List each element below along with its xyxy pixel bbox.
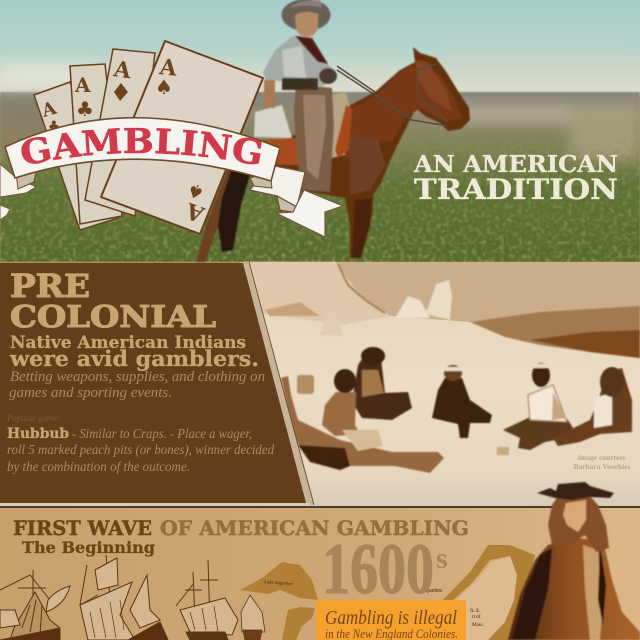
popular game: Hubbub: [7, 426, 69, 442]
right fold: [250, 172, 272, 188]
popular game: - Similar to Craps. - Place a wager,: [72, 426, 252, 441]
subheading: were avid gamblers.: [9, 346, 259, 371]
arm and belt: [264, 80, 275, 108]
left fold: [16, 172, 36, 189]
left hill: [245, 262, 390, 325]
panel: hero photograph: [0, 0, 640, 263]
ridge line: [338, 264, 385, 313]
figure with headband: [432, 365, 492, 438]
heading: [10, 267, 216, 335]
rock formations: [265, 280, 452, 336]
map: St Lawrence and New England: [425, 545, 535, 640]
map: Lake Michigan: [282, 607, 315, 640]
card: ace of clubs upright: ♣: [76, 97, 94, 121]
GAMBLING lettering: GAMBLING: [21, 128, 262, 164]
card: ace of spades: ♠: [155, 75, 173, 99]
hat: [282, 0, 330, 31]
heading: PRE: [10, 267, 90, 305]
callout: illegal: Gambling is illegal: [325, 607, 457, 629]
card: ace of diamonds: [85, 49, 155, 216]
thin dark edge line: [249, 262, 314, 505]
brown panel: [0, 263, 306, 503]
image credit: [574, 453, 631, 471]
grass texture: [0, 150, 640, 262]
rider: [254, 0, 352, 192]
playing cards: [34, 41, 263, 234]
card: ace of spades: A: [182, 197, 209, 228]
shirt: [263, 36, 335, 86]
tan background: [0, 508, 640, 640]
chaps: [294, 84, 334, 192]
heading: COLONIAL: [10, 300, 216, 335]
figure in white shirt: [503, 363, 578, 450]
subtitle: [413, 151, 618, 206]
map: Lake Superior: [240, 562, 318, 600]
dice marks: [497, 447, 509, 455]
popular game: Popular game:: [6, 413, 60, 423]
heading: OF AMERICAN GAMBLING: [160, 516, 469, 540]
card: ace of spades: A: [157, 54, 179, 82]
date: 1600s: s: [436, 542, 448, 575]
description: Betting weapons, supplies, and clothing on: [10, 369, 265, 385]
heading: FIRST WAVE: [13, 516, 152, 540]
right ribbon tails: [250, 165, 305, 207]
colonial man portrait: [508, 482, 640, 640]
tricorn hat: [537, 482, 614, 500]
sky: [0, 0, 640, 96]
subheading: [9, 333, 259, 371]
popular game: by the combination of the outcome.: [7, 459, 190, 474]
date: 1600s: 1600: [322, 529, 434, 609]
right fold lower: [277, 196, 297, 212]
sky wash: [335, 262, 640, 322]
image credit: image courtesy: [578, 453, 626, 462]
panel: first wave: [0, 482, 640, 640]
figure at far right: [553, 367, 632, 446]
image credit: Barbara Voorhies: [574, 462, 631, 471]
callout: illegal: [316, 600, 466, 640]
bridle and reins: [337, 64, 448, 126]
subtitle: TRADITION: [414, 173, 618, 206]
card: ace of spades: ♠: [184, 178, 208, 204]
hair: [548, 496, 609, 552]
distant haze and fields: [0, 55, 640, 160]
saddle and bedroll: [254, 105, 292, 138]
far right tail: [276, 190, 343, 237]
ship three: [176, 560, 238, 640]
left lower tail: [0, 205, 10, 220]
sand background: [240, 262, 640, 508]
popular game: [6, 413, 274, 474]
card: ace of clubs: A: [39, 97, 60, 122]
card: ace of spades: [101, 41, 263, 234]
card: ace of clubs upright: [70, 64, 122, 224]
title banner: [0, 117, 344, 238]
reclining figure: [281, 376, 444, 473]
seated figure, back: [352, 347, 412, 420]
main ribbon: [5, 118, 280, 181]
clay pot: [297, 375, 314, 394]
distant tree line: [470, 306, 640, 358]
subheading: Native American Indians: [10, 333, 246, 353]
face: [563, 500, 586, 532]
heading: [13, 516, 469, 557]
left ribbon tail: [0, 164, 36, 197]
map: St Lawrence and New England: Quebec: [425, 588, 443, 594]
description: games and sporting events.: [9, 385, 172, 401]
card: ace of diamonds: A: [111, 56, 134, 84]
popular game: roll 5 marked peach pits (or bones), winner decided: [7, 442, 274, 457]
seated figure, front: [322, 369, 383, 451]
description: [9, 369, 265, 401]
ship two: [80, 555, 168, 640]
face: [295, 12, 318, 37]
map: Lake Superior: Lake Superior: [263, 580, 293, 587]
figures gambling: [281, 347, 632, 473]
map: St Lawrence and New England: Mass.: [472, 623, 484, 628]
card: ace of clubs upright: A: [74, 73, 91, 97]
ship one: [0, 570, 70, 640]
card: ace of clubs: [34, 82, 118, 230]
heading: The Beginning: [22, 538, 155, 557]
card: ace of clubs: ♣: [48, 119, 60, 134]
ship four: [241, 595, 265, 640]
prairie ground: [0, 92, 640, 262]
panel: pre-colonial illustration: [240, 262, 640, 508]
panel edge stripe: [240, 262, 314, 505]
subtitle: AN AMERICAN: [413, 151, 618, 178]
map: St Lawrence and New England: N. E.: [470, 609, 480, 614]
map: St Lawrence and New England: rt of: [472, 615, 481, 620]
coat: [508, 538, 640, 640]
panel: pre-colonial text: [0, 262, 314, 506]
hat crown: [290, 0, 322, 8]
strip under panel: [0, 503, 310, 506]
horse: [196, 47, 470, 262]
